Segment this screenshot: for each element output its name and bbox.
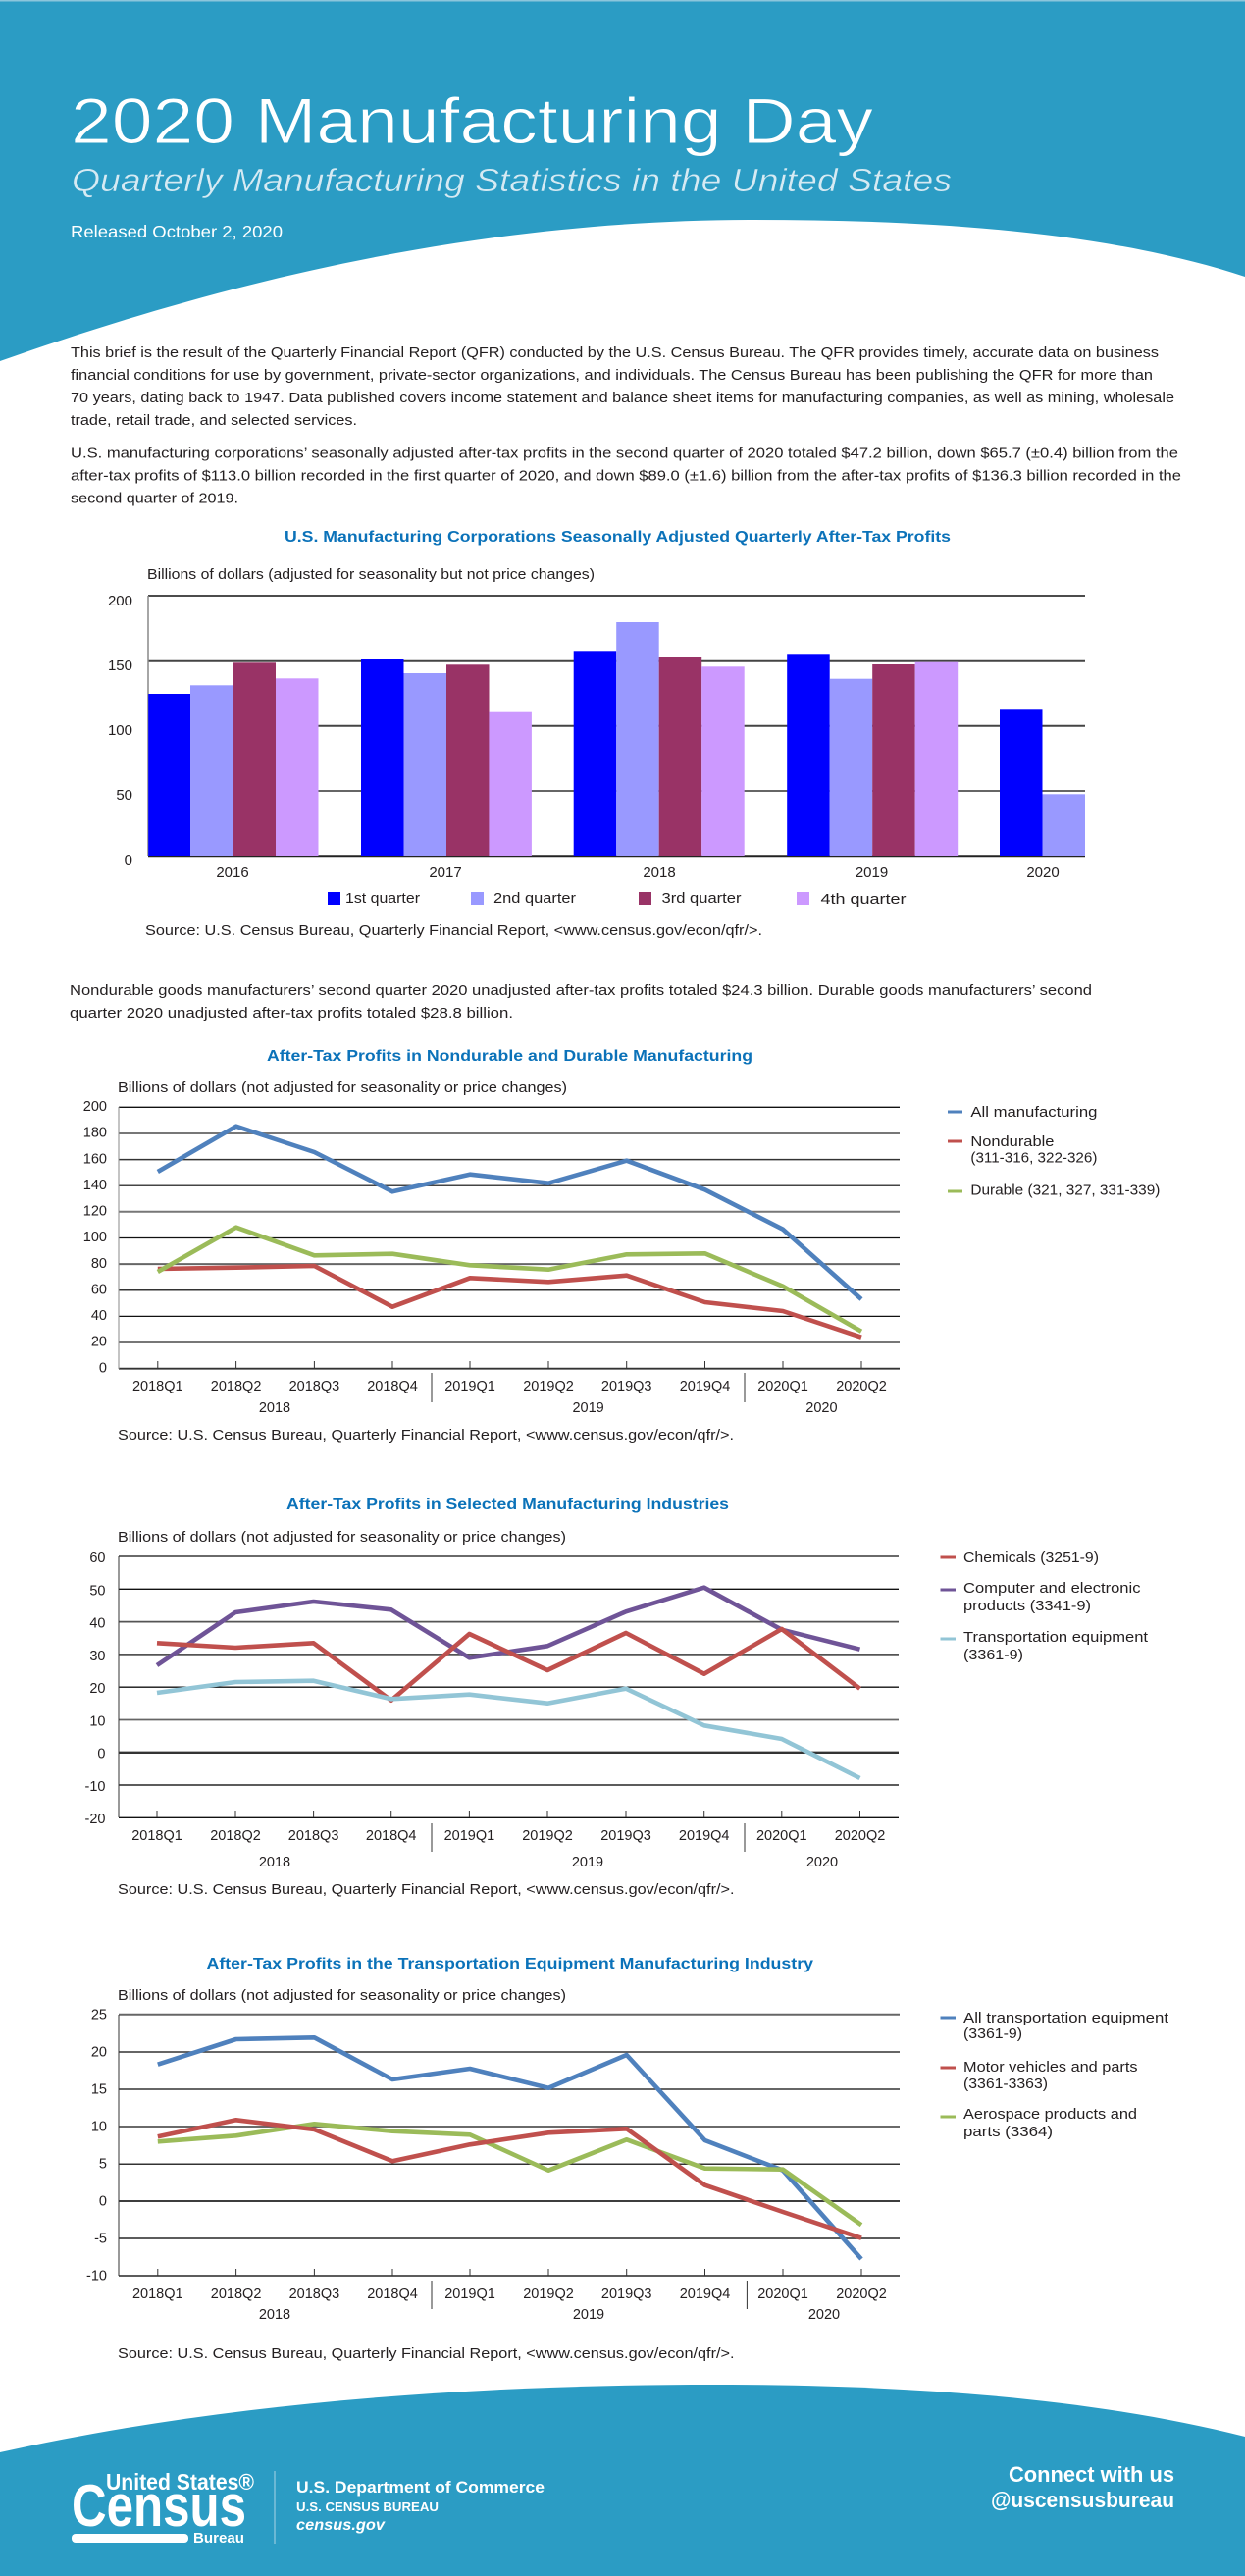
quarter labels: 2018Q3: [289, 1379, 339, 1394]
y axis labels: 120: [83, 1203, 107, 1219]
quarter labels: 2019Q1: [444, 2287, 495, 2302]
legend: [940, 2011, 1168, 2140]
logo divider: [274, 2471, 276, 2544]
y axis labels: 180: [83, 1126, 107, 1141]
y axis labels: 100: [83, 1230, 107, 1245]
x axis labels: 2017: [429, 865, 462, 881]
quarter labels: [132, 2287, 887, 2323]
legend: (311-316, 322-326): [970, 1150, 1097, 1166]
x axis labels: 2016: [216, 865, 249, 881]
y axis labels: 200: [108, 593, 132, 609]
quarter labels: 2020: [805, 1400, 838, 1416]
series: motor vehicles and parts: [158, 2120, 861, 2238]
y axis labels: 40: [91, 1308, 107, 1324]
quarter labels: 2018: [259, 1855, 290, 1870]
quarter labels: [132, 1379, 887, 1416]
social call to action: @uscensusbureau: [991, 2488, 1174, 2512]
legend: Transportation equipment: [963, 1630, 1148, 1646]
y axis labels: 0: [99, 2194, 107, 2210]
quarter labels: 2019Q4: [679, 1828, 730, 1844]
quarter labels: 2020Q1: [756, 1828, 807, 1844]
y axis labels: 150: [108, 657, 132, 674]
x axis labels: 2018: [643, 865, 676, 881]
y axis labels: 10: [89, 1713, 106, 1729]
quarter labels: 2019Q1: [444, 1828, 494, 1844]
y axis labels: -10: [86, 2268, 107, 2284]
nondurable and durable paragraph: quarter 2020 unadjusted after-tax profits totaled $28.8 billion.: [70, 1005, 513, 1022]
bars: 2020: [1000, 709, 1085, 856]
y axis labels: [108, 593, 132, 868]
y axis labels: 40: [89, 1615, 106, 1631]
quarter labels: 2019Q3: [601, 2287, 652, 2302]
x axis labels: 2019: [856, 865, 888, 881]
y axis labels: -5: [94, 2232, 107, 2247]
quarter labels: 2018Q4: [366, 1828, 417, 1844]
quarter labels: 2018Q4: [367, 1379, 418, 1394]
census bureau logo: United States®: [106, 2469, 254, 2495]
quarter labels: 2020Q2: [836, 2287, 887, 2302]
series: durable: [158, 1228, 861, 1332]
y axis labels: 25: [91, 2008, 107, 2024]
y axis labels: 60: [89, 1551, 106, 1566]
quarter labels: 2019: [572, 1855, 603, 1870]
series: nondurable: [158, 1266, 861, 1338]
legend: Nondurable: [970, 1134, 1054, 1150]
bar chart: quarterly profits: [108, 567, 1085, 939]
social call to action: Connect with us: [1009, 2462, 1174, 2487]
axis title: Billions of dollars (not adjusted for seasonality or price changes): [118, 1530, 566, 1546]
bars: 2016: [148, 662, 318, 856]
legend: Aerospace products and: [963, 2107, 1137, 2123]
axis title: Billions of dollars (adjusted for seasonality but not price changes): [147, 567, 595, 583]
line chart: nondurable and durable: [83, 1080, 1160, 1444]
quarter labels: 2018: [259, 1400, 290, 1416]
footer banner: [0, 2385, 1245, 2576]
intro paragraph: financial conditions for use by government, private-sector organizations, and individuals. The Census Bureau has been publishing the QFR for more than: [71, 367, 1153, 384]
y axis labels: 0: [97, 1747, 106, 1762]
profits paragraph: U.S. manufacturing corporations’ seasonally adjusted after-tax profits in the second quarter of 2020 totaled $47.2 billion, down $65.7 (±0.4) billion from the: [71, 446, 1178, 461]
department text: census.gov: [296, 2517, 386, 2534]
intro paragraph: [71, 344, 1174, 429]
y axis labels: 50: [89, 1583, 106, 1599]
quarter labels: 2020Q1: [757, 1379, 808, 1394]
y axis labels: 15: [91, 2082, 107, 2098]
profits paragraph: after-tax profits of $113.0 billion recorded in the first quarter of 2020, and down $89.0 (±1.6) billion from the after-tax profits of $136.3 billion recorded in the: [71, 467, 1181, 485]
y axis labels: 30: [89, 1649, 106, 1664]
line chart: selected industries: [85, 1530, 1148, 1898]
nondurable and durable paragraph: [70, 982, 1092, 1022]
y axis labels: 160: [83, 1151, 107, 1167]
legend: 2nd quarter: [493, 890, 576, 907]
nondurable and durable paragraph: Nondurable goods manufacturers’ second quarter 2020 unadjusted after-tax profits totaled $24.3 billion. Durable goods manufacturers’ second: [70, 982, 1092, 999]
intro paragraph: This brief is the result of the Quarterly Financial Report (QFR) conducted by the U.S. Census Bureau. The QFR provides timely, accurate data on business: [71, 344, 1159, 361]
quarter labels: 2019: [573, 2307, 604, 2323]
legend: [328, 890, 907, 908]
social call to action: [991, 2462, 1174, 2512]
intro paragraph: trade, retail trade, and selected services.: [71, 412, 357, 429]
legend: 1st quarter: [345, 890, 420, 907]
legend: 3rd quarter: [661, 890, 742, 907]
legend: Motor vehicles and parts: [963, 2060, 1138, 2076]
y axis labels: [83, 1099, 107, 1376]
intro paragraph: 70 years, dating back to 1947. Data published covers income statement and balance sheet items for manufacturing companies, as well as mining, wholesale: [71, 390, 1174, 406]
y axis labels: 0: [125, 852, 132, 868]
census bureau logo: Census: [72, 2473, 246, 2539]
y axis labels: 5: [99, 2157, 107, 2173]
source: Source: U.S. Census Bureau, Quarterly Financial Report, <www.census.gov/econ/qfr/>.: [118, 1882, 734, 1898]
census bureau logo: Bureau: [193, 2530, 244, 2547]
source: Source: U.S. Census Bureau, Quarterly Financial Report, <www.census.gov/econ/qfr/>.: [118, 2346, 734, 2362]
legend: Chemicals (3251-9): [963, 1551, 1099, 1566]
quarter labels: 2019Q2: [522, 1828, 573, 1844]
y axis labels: 10: [91, 2120, 107, 2135]
quarter labels: 2018Q2: [211, 1379, 261, 1394]
quarter labels: 2019Q4: [680, 2287, 730, 2302]
legend: All manufacturing: [970, 1105, 1097, 1121]
x axis labels: [216, 865, 1060, 881]
legend: [940, 1551, 1148, 1663]
quarter labels: 2018Q3: [288, 1828, 338, 1844]
quarter labels: 2018Q1: [132, 1379, 183, 1394]
quarter labels: [131, 1828, 885, 1870]
series: all manufacturing: [158, 1127, 861, 1299]
y axis labels: 60: [91, 1282, 107, 1297]
legend: All transportation equipment: [963, 2011, 1168, 2026]
quarter labels: 2019Q3: [601, 1379, 652, 1394]
subtitle: Quarterly Manufacturing Statistics in the United States: [72, 162, 952, 198]
series: transportation equipment: [157, 1681, 859, 1778]
quarter labels: 2019Q2: [523, 1379, 574, 1394]
legend: [948, 1105, 1160, 1199]
quarter labels: 2019Q1: [444, 1379, 495, 1394]
series: all transportation equipment: [158, 2037, 861, 2259]
heading: selected industries: After-Tax Profits in Selected Manufacturing Industries: [286, 1497, 729, 1513]
bars: 2019: [787, 654, 958, 856]
heading: quarterly after-tax profits: U.S. Manufacturing Corporations Seasonally Adjusted Quarterly After-Tax Profits: [285, 529, 951, 546]
y axis labels: 20: [91, 1335, 107, 1350]
quarter labels: 2020Q2: [836, 1379, 887, 1394]
release date: Released October 2, 2020: [71, 222, 283, 241]
legend: (3361-3363): [963, 2077, 1048, 2092]
quarter labels: 2019Q4: [680, 1379, 730, 1394]
legend: (3361-9): [963, 2026, 1022, 2042]
legend: Computer and electronic: [963, 1581, 1140, 1597]
quarter labels: 2019Q2: [523, 2287, 574, 2302]
quarter labels: 2020Q1: [757, 2287, 808, 2302]
y axis labels: 20: [89, 1681, 106, 1697]
quarter labels: 2018Q1: [132, 2287, 183, 2302]
quarter labels: 2018Q2: [211, 2287, 261, 2302]
quarter labels: 2018Q1: [131, 1828, 182, 1844]
y axis labels: [85, 1551, 106, 1827]
legend: parts (3364): [963, 2125, 1053, 2140]
series: aerospace products and parts: [158, 2124, 861, 2225]
y axis labels: 100: [108, 722, 132, 739]
y axis labels: 140: [83, 1178, 107, 1193]
department text: [296, 2478, 545, 2534]
legend: 4th quarter: [820, 891, 907, 908]
y axis labels: -10: [85, 1779, 106, 1795]
quarter labels: 2019Q3: [600, 1828, 651, 1844]
x axis labels: 2020: [1026, 865, 1060, 881]
y axis labels: [86, 2008, 107, 2284]
axis title: Billions of dollars (not adjusted for seasonality or price changes): [118, 1080, 567, 1096]
title: 2020 Manufacturing Day: [71, 84, 873, 157]
axis title: Billions of dollars (not adjusted for seasonality or price changes): [118, 1988, 566, 2004]
heading: transportation equipment: After-Tax Profits in the Transportation Equipment Manufacturing Industry: [206, 1956, 813, 1972]
y axis labels: -20: [85, 1812, 106, 1827]
source: Source: U.S. Census Bureau, Quarterly Financial Report, <www.census.gov/econ/qfr/>.: [145, 923, 762, 939]
heading: nondurable and durable: After-Tax Profits in Nondurable and Durable Manufacturing: [267, 1048, 752, 1065]
quarter labels: 2018Q2: [210, 1828, 261, 1844]
bars: 2018: [574, 622, 745, 856]
y axis labels: 20: [91, 2045, 107, 2061]
y axis labels: 80: [91, 1256, 107, 1272]
quarter labels: 2018Q4: [367, 2287, 418, 2302]
profits paragraph: second quarter of 2019.: [71, 491, 238, 506]
profits paragraph: [71, 446, 1181, 506]
legend: Durable (321, 327, 331-339): [970, 1183, 1160, 1199]
series: chemicals: [157, 1629, 859, 1701]
quarter labels: 2020Q2: [835, 1828, 885, 1844]
header banner: [0, 0, 1245, 361]
series: computer and electronic products: [157, 1588, 859, 1665]
y axis labels: 0: [99, 1360, 107, 1376]
line chart: transportation equipment: [86, 1988, 1168, 2362]
source: Source: U.S. Census Bureau, Quarterly Financial Report, <www.census.gov/econ/qfr/>.: [118, 1428, 734, 1444]
quarter labels: 2019: [572, 1400, 604, 1416]
legend: (3361-9): [963, 1648, 1023, 1663]
quarter labels: 2018: [259, 2307, 290, 2323]
y axis labels: 50: [116, 787, 132, 804]
y axis labels: 200: [83, 1099, 107, 1115]
department text: U.S. CENSUS BUREAU: [296, 2499, 439, 2514]
bars: 2017: [361, 659, 532, 856]
department text: U.S. Department of Commerce: [296, 2478, 545, 2497]
legend: products (3341-9): [963, 1599, 1091, 1614]
quarter labels: 2020: [808, 2307, 840, 2323]
quarter labels: 2018Q3: [289, 2287, 339, 2302]
quarter labels: 2020: [806, 1855, 838, 1870]
